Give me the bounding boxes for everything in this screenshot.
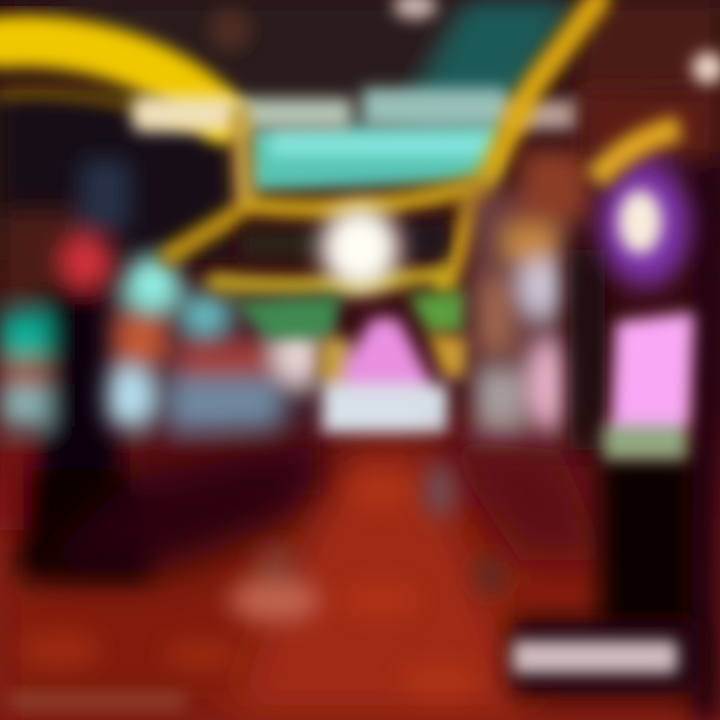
ceiling light <box>208 0 437 52</box>
yellow arch left <box>0 41 222 128</box>
central light <box>320 206 400 290</box>
green far ceiling <box>232 290 468 338</box>
lower-right watermark <box>512 640 678 674</box>
floor <box>0 440 720 720</box>
right aisle machines <box>470 150 590 450</box>
left slot machines <box>0 160 150 580</box>
teal ceiling panel <box>248 122 508 192</box>
sign text glow band <box>132 88 580 156</box>
dark ceiling gaps <box>240 220 450 260</box>
floor pattern patches <box>20 468 480 698</box>
yellow ceiling beams <box>170 0 598 286</box>
lower-left faint caption <box>10 692 185 710</box>
left machine row <box>105 255 325 495</box>
right dark pillar <box>570 150 720 720</box>
right seating <box>440 440 610 560</box>
right glowing screens <box>595 52 720 460</box>
far pink sign <box>318 318 472 433</box>
lower-right dark base <box>510 620 700 695</box>
right machine top <box>580 90 720 287</box>
floor marker <box>229 462 506 622</box>
ceiling <box>0 0 720 260</box>
left dark seating <box>30 440 330 570</box>
